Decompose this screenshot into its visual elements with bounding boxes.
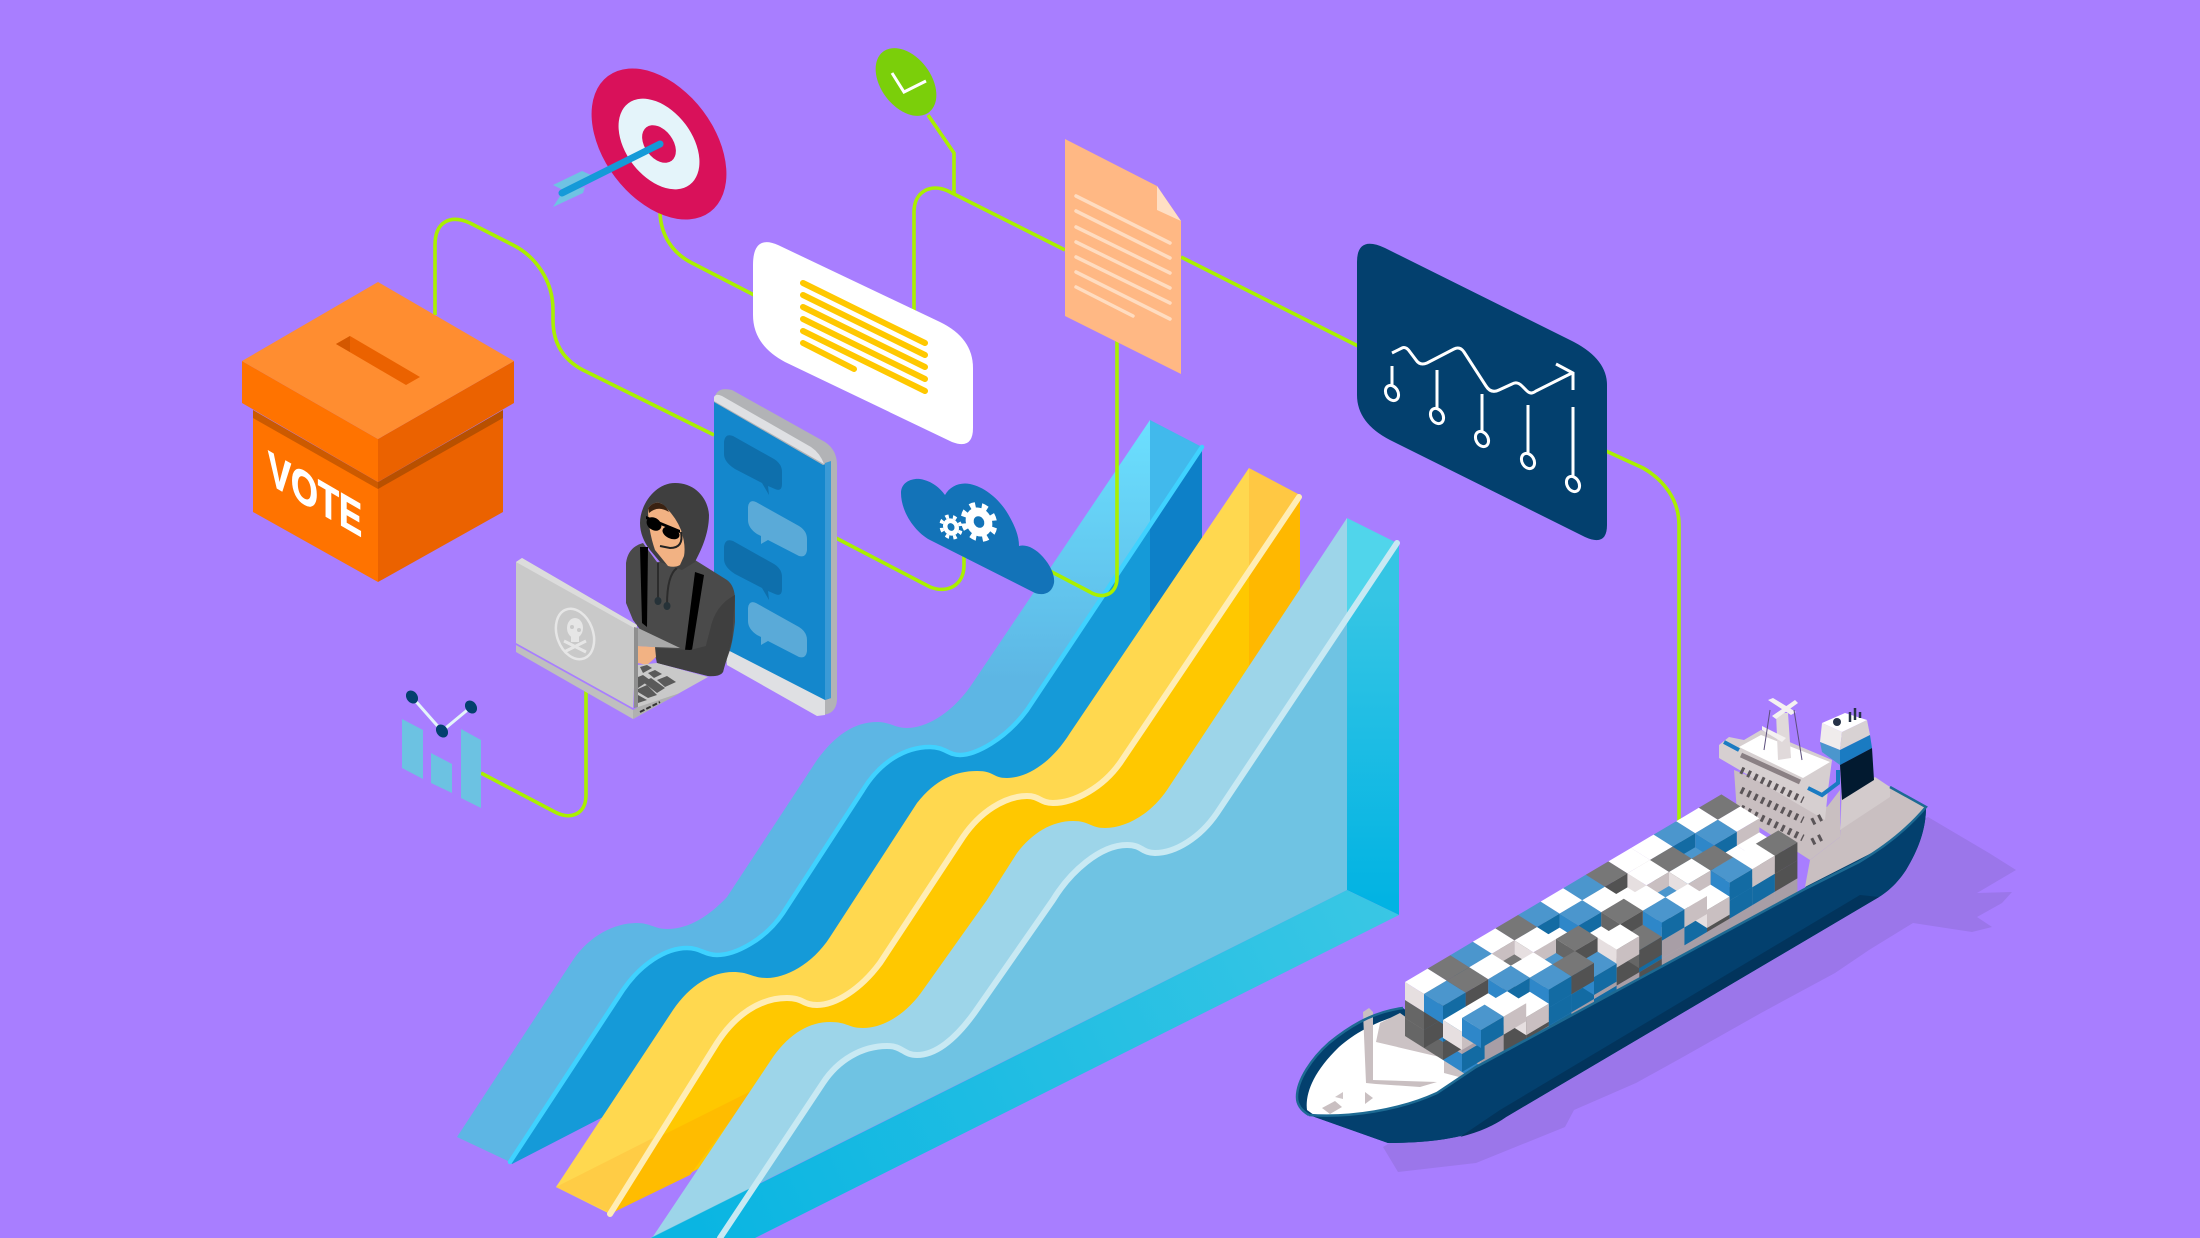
trend line	[1383, 348, 1582, 494]
target with arrow	[553, 43, 754, 245]
document	[1065, 139, 1181, 374]
hull keel shade	[1460, 895, 1879, 1137]
ribbon: front light blue	[650, 518, 1399, 1238]
cloud with gears	[901, 479, 1054, 594]
funnel	[1820, 708, 1874, 800]
hacker body	[626, 543, 735, 676]
phone	[714, 389, 837, 716]
hacker sleeve and hand	[638, 640, 730, 676]
aft block	[1840, 777, 1890, 830]
containers	[1405, 794, 1797, 1084]
accommodation block	[1734, 770, 1840, 860]
box lid	[242, 282, 514, 482]
bars	[402, 719, 481, 808]
dark chart panel	[1357, 244, 1607, 540]
hull rim	[1297, 787, 1926, 1116]
phone body	[714, 389, 837, 715]
foredeck	[1307, 1015, 1476, 1116]
bars and nodes icon	[402, 688, 481, 808]
ribbon: yellow	[556, 468, 1300, 1214]
ballot box	[242, 282, 514, 582]
text lines	[803, 283, 925, 391]
chat bubbles	[724, 435, 807, 657]
hood and face	[640, 483, 709, 570]
top tier	[1405, 794, 1797, 1050]
nodes	[403, 688, 480, 740]
lower tiers	[1405, 848, 1797, 1084]
foredeck block	[1376, 1013, 1476, 1077]
document lines	[1076, 196, 1170, 319]
hull side	[1309, 807, 1926, 1143]
mast	[1762, 698, 1802, 760]
bridge	[1719, 730, 1832, 820]
foremast and crane	[1322, 1008, 1437, 1114]
icon: gears	[937, 499, 1001, 545]
phone top bezel	[714, 395, 824, 464]
bridge wing trim	[1724, 742, 1838, 795]
keyboard keys	[638, 665, 676, 703]
laptop skull emblem	[549, 603, 601, 665]
hull base	[1297, 787, 1926, 1143]
aft deck	[1805, 777, 1926, 887]
connector lines	[435, 115, 1679, 832]
ship shadow	[1383, 817, 2016, 1172]
phone edge highlight	[825, 461, 831, 700]
windows	[1741, 770, 1824, 842]
phone bottom bezel	[727, 647, 825, 716]
box body	[253, 410, 503, 582]
phone screen	[714, 402, 831, 700]
message card	[753, 242, 973, 444]
bridge hatch	[1741, 755, 1800, 782]
area chart ribbons	[457, 420, 1399, 1238]
sunglasses	[644, 514, 681, 542]
laptop	[516, 558, 708, 719]
container ship	[1297, 698, 2016, 1172]
arrow	[553, 144, 660, 207]
bridge top	[1739, 735, 1830, 778]
label: VOTE: VOTE	[268, 440, 362, 547]
green check badge	[863, 37, 949, 127]
hacker at laptop	[516, 483, 735, 719]
target rings	[564, 43, 754, 245]
ribbon: blue	[457, 420, 1202, 1164]
